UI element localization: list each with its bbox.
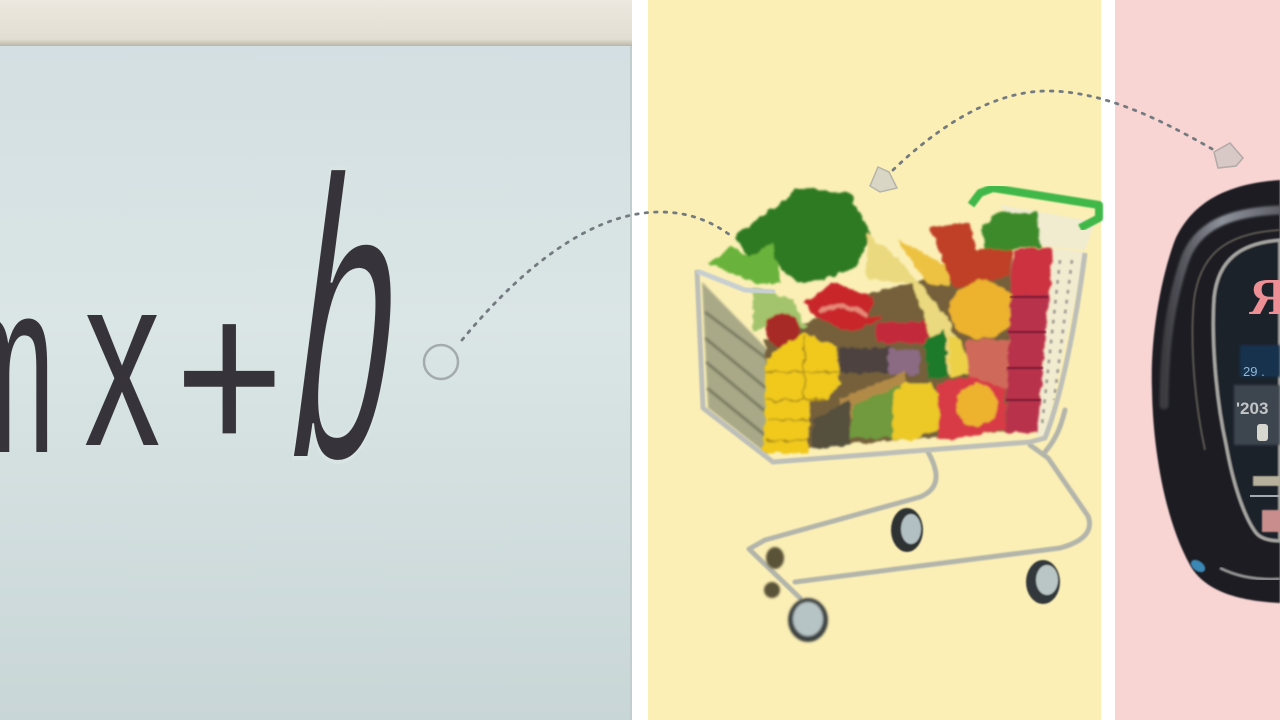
tomato: [766, 313, 800, 347]
yellow top: [897, 240, 950, 287]
purple row: [888, 350, 920, 374]
crimson seams: [1006, 297, 1048, 400]
panel: whiteboard: [0, 0, 632, 720]
cart undercarriage: [749, 410, 1090, 598]
arrowhead: cart: [870, 167, 897, 192]
crimson column: [1005, 248, 1052, 433]
dark row: [840, 347, 890, 373]
groceries base: [765, 260, 1012, 450]
screen grey readout: '203: [1236, 399, 1268, 418]
arrowhead: device: [1214, 143, 1243, 168]
red pepper highlight: [820, 306, 868, 316]
equation: handwritten mx+b: b: [270, 97, 428, 544]
front left wheel: [764, 547, 828, 642]
produce: [708, 188, 1052, 453]
rear middle wheel: [891, 508, 923, 552]
basket side mesh: [1000, 205, 1095, 440]
screen small indicator: [1257, 424, 1268, 441]
speckled red: [965, 340, 1012, 388]
start marker circle: [424, 345, 458, 379]
pale centre: [867, 233, 970, 377]
dotted arrow: equation to cart: [462, 212, 730, 340]
screen pink tab: [1262, 510, 1280, 532]
top left rim: [697, 271, 775, 292]
dotted arrow: cart to device: [893, 91, 1214, 170]
basket rim: [697, 253, 1085, 462]
shell inner line: [1192, 230, 1280, 450]
screen grey band: [1234, 385, 1280, 445]
panel: groceries: [648, 0, 1101, 720]
shell lower lip: [1220, 568, 1280, 579]
red band: [877, 322, 930, 343]
basket left panel: [702, 282, 768, 455]
equation: handwritten mx+b: +: [175, 251, 284, 501]
dark lettuce: [735, 188, 870, 283]
green beans: [850, 385, 900, 438]
red lower: [937, 377, 1005, 440]
orange spices: [838, 372, 905, 425]
screen lower row: [1253, 476, 1280, 486]
yellow pepper seams: [766, 335, 838, 440]
red pepper: [803, 283, 883, 333]
screen blue readout: 29 .: [1243, 364, 1265, 379]
device shell: [1152, 180, 1280, 603]
screen blue band: [1240, 345, 1280, 377]
green stalk: [925, 330, 948, 378]
illustration: shopping cart: [697, 188, 1099, 642]
right greens: [982, 212, 1040, 250]
light lettuce: [708, 243, 780, 283]
illustration: device: [1152, 180, 1280, 603]
yellow piece: [893, 383, 938, 440]
pale lettuce: [753, 287, 807, 330]
dark lower strip: [812, 400, 850, 448]
blue accent: [1189, 557, 1207, 575]
equation: handwritten mx+b: x: [84, 224, 160, 498]
equation: handwritten mx+b: [0, 97, 428, 544]
screen: [1213, 240, 1280, 541]
shell highlight: [1164, 210, 1280, 405]
crimson top: [1011, 248, 1052, 295]
red orange top: [930, 222, 1012, 287]
orange lower: [956, 384, 998, 426]
rear right wheel: [1026, 560, 1060, 604]
orange fruit: [949, 281, 1015, 339]
screen divider: [1250, 495, 1280, 497]
yellow wedge: [948, 335, 972, 378]
green handle: [971, 188, 1099, 228]
yellow peppers: [763, 333, 840, 453]
panel: device background: [1115, 0, 1280, 720]
